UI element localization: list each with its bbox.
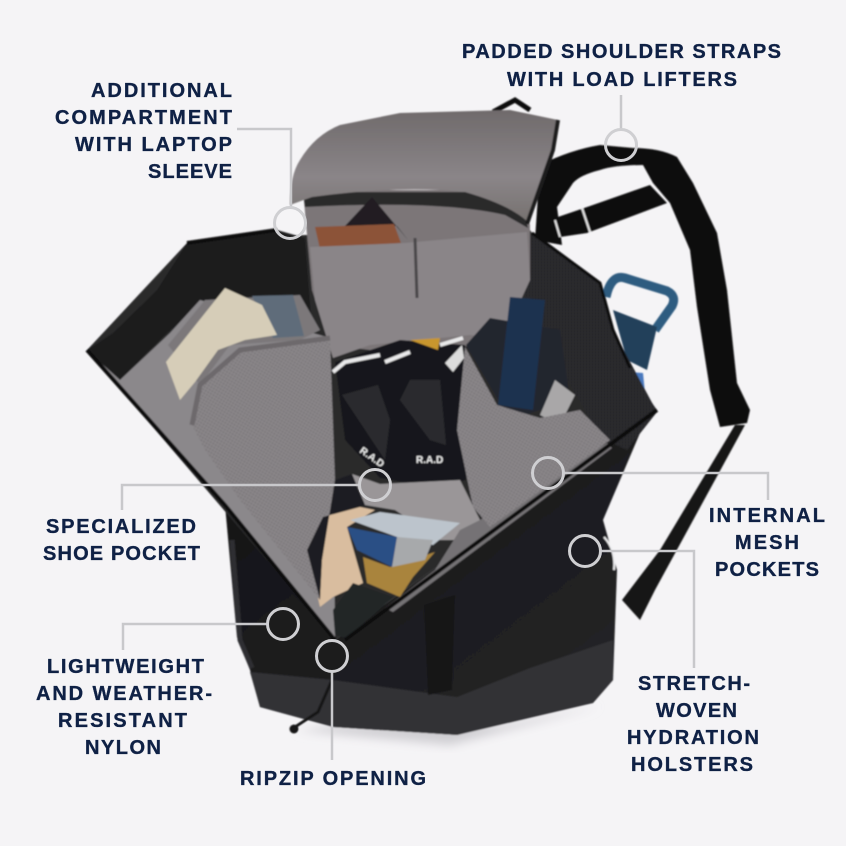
lower right facet (457, 575, 613, 697)
marker ring (268, 608, 298, 640)
label: SPECIALIZED (46, 516, 196, 538)
label: RESISTANT (58, 710, 187, 732)
label (55, 80, 232, 183)
water bottle (606, 277, 674, 403)
leader line (123, 624, 267, 650)
brown wallet (315, 224, 401, 249)
callout: lightweight nylon (36, 608, 298, 759)
callout: padded shoulder straps (462, 41, 781, 160)
label: LIGHTWEIGHT (47, 656, 204, 678)
right zipper line (345, 410, 657, 640)
leader line (122, 485, 359, 510)
label: MESH (735, 532, 799, 554)
webbing strap (424, 595, 455, 695)
label: STRETCH- (638, 673, 750, 695)
beige sock (307, 507, 375, 607)
right dark mesh flap (523, 233, 657, 450)
interior backing (87, 230, 657, 640)
label (627, 673, 759, 776)
shoes (333, 338, 470, 488)
zipper pull (290, 680, 332, 734)
callout: stretch-woven hydration holsters (570, 536, 759, 776)
leader line (331, 672, 333, 760)
grey garment (168, 295, 320, 385)
right pocket contents: navy strap (466, 297, 575, 425)
callout: internal mesh pockets (532, 458, 825, 581)
leader line (601, 551, 694, 668)
base panel (250, 640, 613, 735)
marker ring (316, 640, 348, 672)
label: NYLON (85, 737, 161, 759)
dark bundle (333, 583, 393, 638)
upper left black flap (87, 230, 312, 380)
label: HYDRATION (627, 727, 759, 749)
label: PADDED SHOULDER STRAPS (462, 41, 781, 63)
label (36, 656, 212, 759)
label: WITH LOAD LIFTERS (507, 69, 737, 91)
label: SLEEVE (148, 161, 232, 183)
left flap grey lining (100, 300, 335, 640)
shadow under lid (303, 192, 528, 228)
pocket zipper pull (415, 238, 417, 298)
marker ring (570, 536, 600, 566)
label: ADDITIONAL (91, 80, 232, 102)
left mesh pocket (192, 338, 335, 600)
callout: specialized shoe pocket (43, 470, 390, 565)
right flap zipper (532, 233, 630, 368)
leader line (564, 473, 768, 500)
upper compartment interior (303, 190, 530, 350)
center grey pouch (352, 474, 490, 540)
label: HOLSTERS (631, 754, 753, 776)
label: WITH LAPTOP (75, 134, 232, 156)
label: RIPZIP OPENING (240, 768, 426, 790)
phone (345, 197, 408, 240)
marker ring (360, 470, 390, 500)
left flap zipper (87, 230, 335, 640)
marker ring (532, 458, 564, 488)
label (462, 41, 781, 91)
label: INTERNAL (709, 505, 825, 527)
label: POCKETS (715, 559, 819, 581)
lower strap (622, 425, 745, 620)
label: COMPARTMENT (55, 107, 232, 129)
label: AND WEATHER- (36, 683, 212, 705)
label: WOVEN (656, 700, 737, 722)
side webbing (232, 540, 252, 668)
rear shoulder strap (535, 145, 750, 427)
marker ring (606, 130, 636, 160)
marker ring (274, 208, 306, 238)
right inner grey lining (385, 443, 612, 612)
upper laptop sleeve pocket (310, 232, 530, 358)
top lid (290, 110, 558, 222)
blue-grey garment (252, 295, 304, 338)
label: SHOE POCKET (43, 543, 200, 565)
shoes: R.A.D (357, 445, 386, 470)
top handle (493, 100, 530, 112)
floor shadow (296, 706, 600, 745)
beige shirt (166, 288, 277, 400)
backpack illustration (87, 100, 750, 745)
leader line (237, 129, 291, 208)
food container (347, 512, 460, 597)
lid zipper edge (527, 120, 558, 224)
lower left dark pocket shadow (307, 474, 365, 600)
label (43, 516, 200, 565)
leader line (620, 95, 622, 129)
label (709, 505, 825, 581)
right mesh pocket (457, 347, 610, 527)
callout: additional compartment (55, 80, 306, 238)
shoes: R.A.D (416, 455, 443, 466)
load lifter strap with buckle (555, 185, 667, 237)
main black body (225, 410, 657, 735)
callout: ripzip opening (240, 640, 426, 790)
side holster loop (604, 537, 614, 570)
